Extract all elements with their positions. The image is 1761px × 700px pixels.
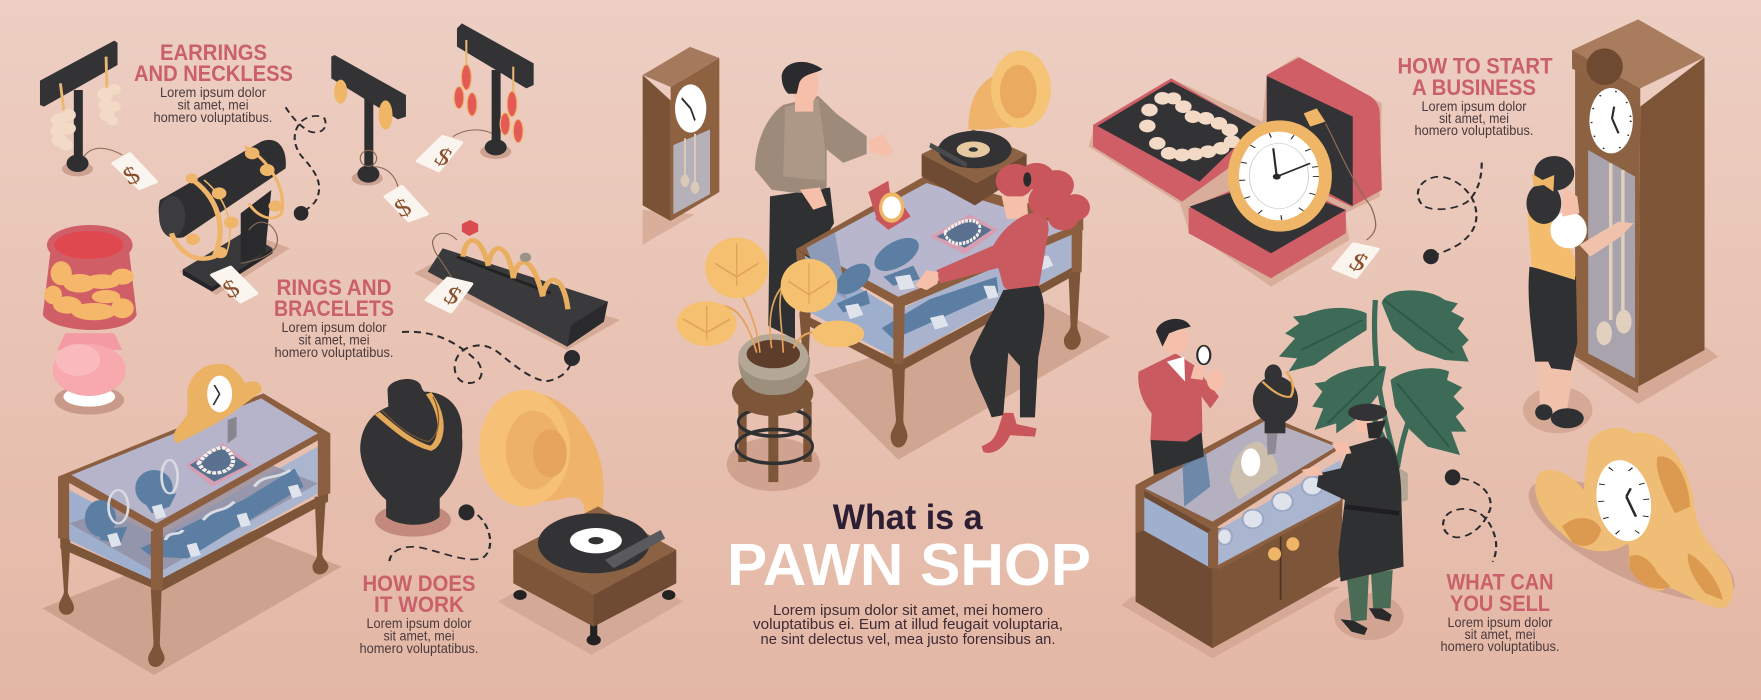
section: what can you sell: WHAT CAN xyxy=(1446,570,1554,594)
center table shadow and legs xyxy=(799,268,1110,460)
section: earrings and neckless xyxy=(134,40,293,125)
lamp base xyxy=(53,344,126,415)
intro text: ne sint delectus vel, mea justo forensibus an. xyxy=(760,632,1056,648)
dotted connector: rings xyxy=(402,332,580,383)
ring display xyxy=(414,220,620,350)
wall clock xyxy=(643,47,719,245)
section: what can you sell: homero voluptatibus. xyxy=(1440,638,1560,654)
intro text: Lorem ipsum dolor sit amet, mei homero xyxy=(773,603,1043,619)
section: what can you sell: sit amet, mei xyxy=(1464,626,1536,642)
section: rings and bracelets: RINGS AND xyxy=(276,275,392,300)
bust on cabinet xyxy=(1253,364,1298,433)
gramophone large xyxy=(479,390,683,655)
jewellery boxes with pocket watch xyxy=(1089,57,1382,287)
woman at the table xyxy=(915,163,1090,453)
section: what can you sell: YOU SELL xyxy=(1450,591,1550,616)
bracelet holder xyxy=(159,140,290,303)
gold plant on stool xyxy=(677,237,864,491)
section: earrings and neckless: sit amet, mei xyxy=(178,96,248,112)
pearl box xyxy=(1093,78,1256,202)
section: what can you sell xyxy=(1440,570,1560,654)
section: earrings and neckless: AND NECKLESS xyxy=(134,61,293,86)
section: rings and bracelets xyxy=(274,275,394,360)
shop keeper xyxy=(755,62,893,339)
dotted connector: how does it work xyxy=(389,504,490,563)
earring stand with red drops: $ xyxy=(430,142,457,171)
earring stand with gold drops xyxy=(331,55,427,222)
section: rings and bracelets: homero voluptatibus. xyxy=(274,344,394,360)
section: earrings and neckless: EARRINGS xyxy=(160,40,267,65)
watch box xyxy=(1189,57,1382,278)
section: how to start a business: Lorem ipsum dolor xyxy=(1422,98,1527,114)
display cabinet xyxy=(1121,364,1343,658)
section: how does it work: IT WORK xyxy=(374,592,464,617)
bracelet holder: $ xyxy=(217,274,244,303)
earring stand with gold drops: $ xyxy=(389,193,416,222)
mantel clock on case xyxy=(174,364,261,443)
monstera plant xyxy=(1279,290,1469,503)
section: how to start a business xyxy=(1398,54,1553,138)
ring display: $ xyxy=(439,281,467,310)
section: how does it work xyxy=(360,571,478,656)
ornate mantel clock xyxy=(1506,428,1757,622)
customer in dark coat xyxy=(1301,404,1404,640)
earring stand with pearls: $ xyxy=(118,161,145,190)
section: how does it work: homero voluptatibus. xyxy=(360,640,478,656)
dotted connector: what can you sell xyxy=(1443,469,1496,562)
watch box: $ xyxy=(1344,248,1373,277)
section: what can you sell: Lorem ipsum dolor xyxy=(1448,614,1553,630)
section: how to start a business: sit amet, mei xyxy=(1439,110,1509,126)
earring stand with red drops xyxy=(418,23,534,171)
section: how to start a business: A BUSINESS xyxy=(1412,75,1536,100)
section: how does it work: HOW DOES xyxy=(362,571,476,596)
section: rings and bracelets: Lorem ipsum dolor xyxy=(282,319,387,335)
title xyxy=(727,498,1091,598)
intro text: voluptatibus ei. Eum at illud feugait voluptaria, xyxy=(753,617,1063,633)
section: how to start a business: HOW TO START xyxy=(1398,54,1553,78)
section: how to start a business: homero voluptatibus. xyxy=(1414,122,1534,138)
dotted connector: how to start xyxy=(1418,163,1482,264)
section: how does it work: Lorem ipsum dolor xyxy=(366,615,472,631)
appraiser in red jacket xyxy=(1138,319,1224,475)
title: What is a xyxy=(833,498,983,537)
section: earrings and neckless: homero voluptatibus. xyxy=(154,109,272,125)
display case with jewellery xyxy=(42,364,341,675)
small gramophone xyxy=(922,50,1051,205)
intro text xyxy=(753,603,1063,648)
watch box on table xyxy=(868,181,911,230)
section: earrings and neckless: Lorem ipsum dolor xyxy=(160,84,266,100)
section: rings and bracelets: sit amet, mei xyxy=(298,332,370,348)
section: rings and bracelets: BRACELETS xyxy=(274,296,394,321)
center table with jewellery xyxy=(796,175,1083,373)
woman at grandfather clock xyxy=(1523,156,1634,433)
table lamp xyxy=(43,225,137,350)
earring stand with pearls xyxy=(40,41,156,190)
necklace bust xyxy=(360,379,462,537)
section: how does it work: sit amet, mei xyxy=(384,628,454,644)
grandfather clock xyxy=(1572,19,1718,404)
title: PAWN SHOP xyxy=(727,532,1091,598)
dotted connector: earrings xyxy=(286,107,326,221)
